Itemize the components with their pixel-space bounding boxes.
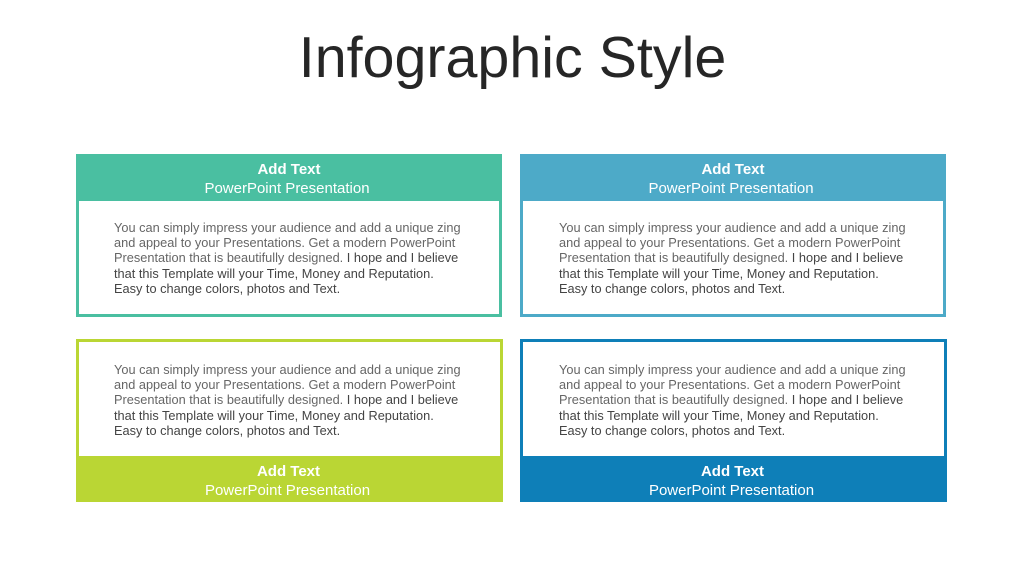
- header band: PowerPoint Presentation: [648, 180, 814, 196]
- panel: top left: [76, 154, 502, 317]
- header band: Add Text: [701, 161, 765, 178]
- panel: bottom right: [520, 339, 947, 502]
- body text: Presentation that is beautifully designed. I hope and I believe: [559, 392, 903, 407]
- panel: bottom left: [76, 339, 503, 502]
- body text: [559, 362, 906, 438]
- panel frame: [520, 339, 947, 502]
- body text: and appeal to your Presentations. Get a modern PowerPoint: [114, 235, 455, 250]
- body text: Easy to change colors, photos and Text.: [559, 281, 785, 296]
- body text: Easy to change colors, photos and Text.: [114, 281, 340, 296]
- body text: [559, 220, 906, 296]
- body text: that this Template will your Time, Money and Reputation.: [114, 266, 434, 281]
- body text: that this Template will your Time, Money and Reputation.: [114, 408, 434, 423]
- body text: [114, 220, 461, 296]
- header band: Add Text: [257, 161, 321, 178]
- body text: Presentation that is beautifully designed. I hope and I believe: [114, 392, 458, 407]
- footer band: Add Text: [701, 463, 764, 480]
- header band: PowerPoint Presentation: [204, 180, 370, 196]
- footer band: [76, 456, 503, 502]
- body text: and appeal to your Presentations. Get a modern PowerPoint: [559, 377, 900, 392]
- header band: [76, 154, 502, 201]
- header band: [520, 154, 946, 201]
- body text: You can simply impress your audience and add a unique zing: [559, 220, 906, 235]
- body text: that this Template will your Time, Money and Reputation.: [559, 266, 879, 281]
- footer band: PowerPoint Presentation: [649, 482, 814, 498]
- body text: and appeal to your Presentations. Get a modern PowerPoint: [559, 235, 900, 250]
- footer band: [520, 456, 947, 502]
- panel frame: [76, 154, 502, 317]
- panel: top right: [520, 154, 946, 317]
- body text: Easy to change colors, photos and Text.: [114, 423, 340, 438]
- body text: Presentation that is beautifully designed. I hope and I believe: [559, 250, 903, 265]
- panel frame: [520, 154, 946, 317]
- body text: You can simply impress your audience and add a unique zing: [114, 362, 461, 377]
- body text: You can simply impress your audience and add a unique zing: [559, 362, 906, 377]
- body text: and appeal to your Presentations. Get a modern PowerPoint: [114, 377, 455, 392]
- panel frame: [76, 339, 503, 502]
- body text: You can simply impress your audience and add a unique zing: [114, 220, 461, 235]
- footer band: Add Text: [257, 463, 320, 480]
- title: Infographic Style: [299, 26, 726, 90]
- footer band: PowerPoint Presentation: [205, 482, 370, 498]
- body text: Easy to change colors, photos and Text.: [559, 423, 785, 438]
- body text: that this Template will your Time, Money and Reputation.: [559, 408, 879, 423]
- body text: [114, 362, 461, 438]
- body text: Presentation that is beautifully designed. I hope and I believe: [114, 250, 458, 265]
